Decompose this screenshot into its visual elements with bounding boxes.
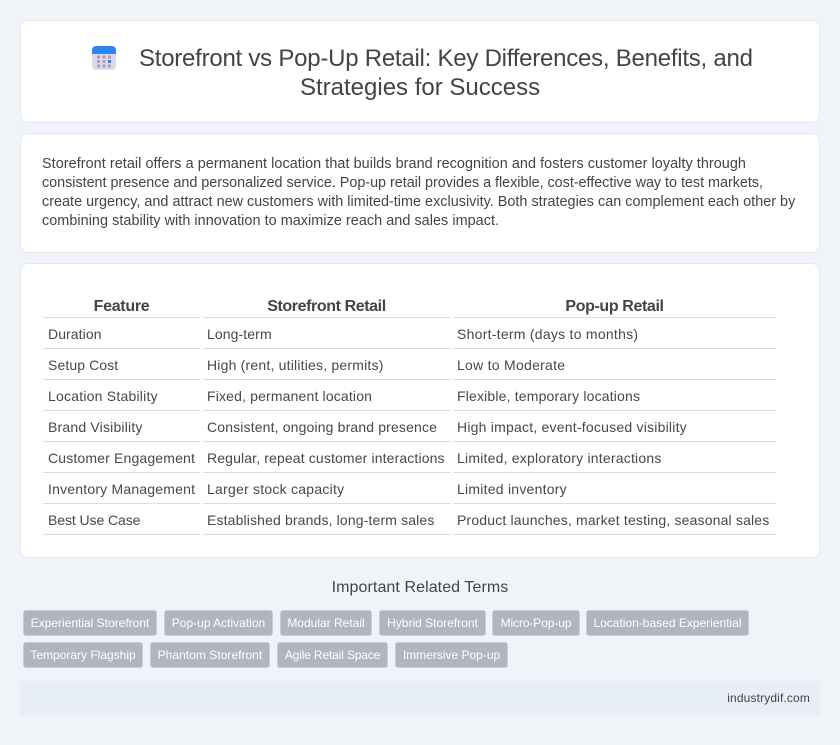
footer source text: industrydif.com (727, 691, 810, 705)
comparison table: Limited inventory (457, 481, 567, 497)
title: Storefront vs Pop-Up Retail: Key Differences, Benefits, and (139, 45, 753, 72)
intro paragraph: create urgency, and attract new customers with limited-time exclusivity. Both strategies can complement each other by (42, 194, 795, 210)
comparison table: Inventory Management (48, 481, 195, 497)
related term tags: Phantom Storefront (158, 648, 262, 662)
comparison table: Pop-up Retail (565, 298, 664, 315)
comparison table: Consistent, ongoing brand presence (207, 419, 437, 435)
title (139, 45, 753, 101)
comparison table: Larger stock capacity (207, 481, 344, 497)
comparison table: Best Use Case (48, 512, 140, 528)
comparison table: Fixed, permanent location (207, 388, 372, 404)
related term tags: Agile Retail Space (285, 648, 380, 662)
comparison table: Flexible, temporary locations (457, 388, 640, 404)
comparison table (43, 298, 776, 535)
comparison table: Duration (48, 326, 102, 342)
heading: related terms: Important Related Terms (332, 579, 508, 596)
related term tags: Immersive Pop-up (403, 648, 500, 662)
panel: title card (20, 20, 820, 123)
comparison table: Regular, repeat customer interactions (207, 450, 445, 466)
intro paragraph (42, 156, 796, 229)
comparison table: Short-term (days to months) (457, 326, 638, 342)
panel: intro card (20, 133, 820, 253)
related term tags (23, 610, 749, 668)
comparison table: Customer Engagement (48, 450, 195, 466)
related term tags: Location-based Experiential (593, 616, 742, 630)
comparison table: Brand Visibility (48, 419, 143, 435)
comparison table: Setup Cost (48, 357, 118, 373)
related term tags: Modular Retail (287, 616, 365, 630)
comparison table: Long-term (207, 326, 272, 342)
related term tags: Hybrid Storefront (387, 616, 478, 630)
intro paragraph: consistent presence and personalized service. Pop-up retail provides a flexible, cost-effective way to test markets, (42, 175, 763, 191)
title: Strategies for Success (300, 74, 540, 101)
icon: calendar (92, 46, 116, 70)
intro paragraph: Storefront retail offers a permanent location that builds brand recognition and fosters customer loyalty through (42, 156, 746, 172)
comparison table: Feature (94, 298, 149, 315)
comparison table: High (rent, utilities, permits) (207, 357, 384, 373)
comparison table: Established brands, long-term sales (207, 512, 434, 528)
comparison table: Low to Moderate (457, 357, 565, 373)
comparison table: Storefront Retail (267, 298, 386, 315)
panel: comparison table card (20, 263, 820, 558)
related term tags: Experiential Storefront (31, 616, 149, 630)
related term tags: Temporary Flagship (30, 648, 136, 662)
intro paragraph: combining stability with innovation to maximize reach and sales impact. (42, 213, 499, 229)
footer bar (20, 681, 820, 715)
comparison table: High impact, event-focused visibility (457, 419, 687, 435)
comparison table: Location Stability (48, 388, 158, 404)
related term tags: Pop-up Activation (172, 616, 265, 630)
comparison table: Product launches, market testing, seasonal sales (457, 512, 769, 528)
related term tags: Micro-Pop-up (501, 616, 571, 630)
comparison table: Limited, exploratory interactions (457, 450, 662, 466)
